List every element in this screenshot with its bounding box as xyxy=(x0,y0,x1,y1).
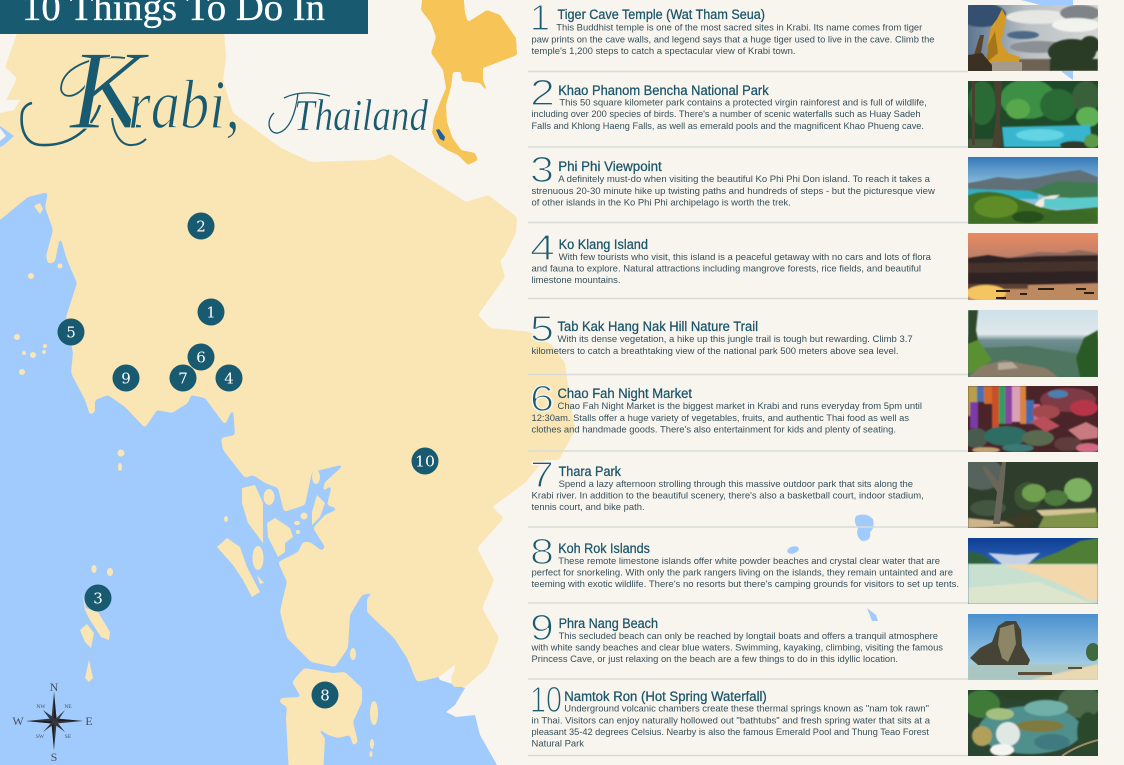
list item 7: Thara Park xyxy=(528,454,1098,528)
compass rose xyxy=(12,680,93,764)
compass rose: S xyxy=(51,750,57,764)
photo: park trees xyxy=(968,462,1098,528)
list item 5: Tab Kak Hang Nak Hill Nature Trail: With its dense vegetation, a hike up this jungle trail is tough but rewarding. Climb 3.7 xyxy=(558,334,913,345)
list item 7: Thara Park: Krabi river. In addition to the beautiful scenery, there's also a basketball court, indoor stadium, xyxy=(532,490,924,502)
marker 8: 8 xyxy=(320,686,330,704)
list item 9: Phra Nang Beach xyxy=(528,607,1100,680)
list item 10: Namtok Ron: pleasant 35-42 degrees Celsius. Nearby is also the famous Emerald Pool and Thung Teao Forest xyxy=(532,727,929,738)
marker 5: 5 xyxy=(66,324,76,342)
list item 2: Khao Phanom Bencha National Park: Khao Phanom Bencha National Park xyxy=(558,83,769,98)
marker 10: 10 xyxy=(415,452,435,470)
marker 4 xyxy=(216,364,242,392)
photo: limestone rock at the beach xyxy=(968,614,1098,680)
list item 10: Namtok Ron: Natural Park xyxy=(532,738,584,750)
list item 4: Ko Klang Island xyxy=(528,227,1098,301)
list item 3: Phi Phi Viewpoint: strenuous 20-30 minute hike up twisting paths and hundreds of steps - but the picturesque view xyxy=(532,186,935,197)
water patches behind the list xyxy=(1021,0,1073,80)
marker 2 xyxy=(188,212,214,240)
list item 4: Ko Klang Island: Ko Klang Island xyxy=(559,237,648,252)
list item 10: Namtok Ron: 10 xyxy=(530,679,562,720)
photo: night market fabrics xyxy=(968,386,1098,452)
marker 10 xyxy=(412,448,438,474)
compass rose: N xyxy=(50,680,59,694)
compass rose: SE xyxy=(65,734,72,740)
list item 10: Namtok Ron: in Thai. Visitors can enjoy naturally hollowed out "bathtubs" and fresh spring water that sits at a xyxy=(532,716,931,726)
list item 8: Koh Rok Islands: Koh Rok Islands xyxy=(558,541,650,556)
photo: hot spring waterfall xyxy=(968,690,1098,756)
list item 3: Phi Phi Viewpoint: 3 xyxy=(530,149,554,190)
list item 8: Koh Rok Islands: These remote limestone islands offer white powder beaches and crystal clear water that are xyxy=(558,556,940,567)
title: Krabi,: K xyxy=(68,29,150,153)
title: Krabi, xyxy=(22,29,240,153)
list item 6: Chao Fah Night Market: clothes and handmade goods. There's also entertainment for kids and plenty of seating. xyxy=(532,424,896,436)
list item 5: Tab Kak Hang Nak Hill Nature Trail xyxy=(528,308,1098,377)
list item 7: Thara Park: 7 xyxy=(530,454,554,495)
marker 8 xyxy=(312,682,338,708)
photo: jungle and emerald pool xyxy=(968,81,1098,148)
marker 7: 7 xyxy=(178,370,188,388)
list item 3: Phi Phi Viewpoint: Phi Phi Viewpoint xyxy=(558,159,662,174)
list item 4: Ko Klang Island: and fauna to explore. Natural attractions including mangrove forests, rice fields, and beautiful xyxy=(532,264,921,274)
marker 9: 9 xyxy=(121,370,131,388)
list item 4: Ko Klang Island: limestone mountains. xyxy=(532,275,620,286)
list item 1: Tiger Cave Temple: This Buddhist temple is one of the most sacred sites in Krabi. Its name comes from tiger xyxy=(556,22,922,34)
list item 9: Phra Nang Beach: This secluded beach can only be reached by longtail boats and offers a tranquil atmosphere xyxy=(559,631,938,642)
compass rose: E xyxy=(85,714,93,728)
list item 2: Khao Phanom Bencha National Park: Falls and Khlong Haeng Falls, as well as emerald pools and the magnificent Khao Phueng cave. xyxy=(532,121,924,132)
list item 2: Khao Phanom Bencha National Park xyxy=(528,72,1100,149)
list item 9: Phra Nang Beach: Princess Cave, or just relaxing on the beach are a few things to do in this idyllic location. xyxy=(532,654,898,665)
list item 4: Ko Klang Island: 4 xyxy=(530,227,555,268)
marker 6 xyxy=(188,344,214,370)
marker 3: 3 xyxy=(93,590,103,608)
list item 8: Koh Rok Islands xyxy=(528,531,1098,604)
list item 1: Tiger Cave Temple xyxy=(528,0,1100,72)
list item 7: Thara Park: tennis court, and bike path. xyxy=(532,502,645,513)
compass rose: NE xyxy=(64,704,72,710)
islands xyxy=(14,203,378,757)
list item 9: Phra Nang Beach: 9 xyxy=(530,607,554,648)
marker 3 xyxy=(84,584,112,612)
marker 9 xyxy=(112,364,140,392)
list item 2: Khao Phanom Bencha National Park: including over 200 species of birds. There's a number of scenic waterfalls such as Huay Sadeh xyxy=(532,109,920,120)
small bay inlet xyxy=(0,100,20,147)
list item 4: Ko Klang Island: With few tourists who visit, this island is a peaceful getaway with no cars and lots of flora xyxy=(559,252,932,263)
mainland xyxy=(0,20,575,687)
list item 5: Tab Kak Hang Nak Hill Nature Trail: Tab Kak Hang Nak Hill Nature Trail xyxy=(558,319,758,334)
photo: white sand beach xyxy=(968,538,1098,604)
list item 3: Phi Phi Viewpoint xyxy=(528,149,1098,224)
photo: sunset over mangroves xyxy=(968,233,1098,300)
marker 4: 4 xyxy=(224,370,234,388)
list item 2: Khao Phanom Bencha National Park: 2 xyxy=(530,72,555,113)
list item 8: Koh Rok Islands: 8 xyxy=(530,531,554,572)
locator map of Thailand xyxy=(421,0,517,165)
photo: Phi Phi island view xyxy=(968,157,1098,224)
list item 5: Tab Kak Hang Nak Hill Nature Trail: kilometers to catch a breathtaking view of the national park 500 meters above sea level. xyxy=(532,346,898,357)
list item 6: Chao Fah Night Market: 6 xyxy=(530,378,554,419)
list item 2: Khao Phanom Bencha National Park: This 50 square kilometer park contains a protected virgin rainforest and is full of wildlife, xyxy=(559,98,927,108)
list item 3: Phi Phi Viewpoint: A definitely must-do when visiting the beautiful Ko Phi Phi Don island. To reach it takes a xyxy=(558,174,931,185)
marker 6: 6 xyxy=(196,348,206,366)
list item 10: Namtok Ron xyxy=(528,679,1102,756)
photo: golden Buddha xyxy=(968,5,1098,71)
compass rose: SW xyxy=(36,734,45,740)
list item 6: Chao Fah Night Market: Chao Fah Night Market is the biggest market in Krabi and runs everyday from 5pm until xyxy=(558,401,922,412)
list item 7: Thara Park: Spend a lazy afternoon strolling through this massive outdoor park that sits along the xyxy=(559,479,913,490)
title: Thailand: Thailand xyxy=(294,91,429,140)
list item 7: Thara Park: Thara Park xyxy=(559,464,621,479)
list item 1: Tiger Cave Temple: temple's 1,200 steps to catch a spectacular view of Krabi town. xyxy=(532,46,796,57)
map markers xyxy=(58,212,438,708)
marker 2: 2 xyxy=(196,218,206,236)
list item 10: Namtok Ron: Namtok Ron (Hot Spring Waterfall) xyxy=(564,689,767,704)
marker 7 xyxy=(170,364,196,392)
sea xyxy=(0,190,497,765)
list item 1: Tiger Cave Temple: Tiger Cave Temple (Wat Tham Seua) xyxy=(558,7,765,22)
list item 6: Chao Fah Night Market: Chao Fah Night Market xyxy=(558,386,692,401)
list item 9: Phra Nang Beach: with white sandy beaches and clear blue waters. Swimming, kayaking, climbing, visiting the famous xyxy=(531,642,943,654)
title banner xyxy=(0,0,368,34)
list item 3: Phi Phi Viewpoint: of other islands in the Ko Phi Phi archipelago is worth the trek. xyxy=(532,198,791,208)
list item 6: Chao Fah Night Market xyxy=(528,378,1100,453)
photo: valley view xyxy=(968,310,1098,377)
list item 1: Tiger Cave Temple: paw prints on the cave walls, and legend says that a huge tiger used to live in the cave. Climb the xyxy=(532,34,934,46)
list item 6: Chao Fah Night Market: 12:30am. Stalls offer a huge variety of vegetables, fruits, and authentic Thai food as well as xyxy=(532,413,909,424)
list item 5: Tab Kak Hang Nak Hill Nature Trail: 5 xyxy=(530,308,554,349)
marker 5 xyxy=(58,318,84,346)
marker 1 xyxy=(198,298,224,326)
list item 9: Phra Nang Beach: Phra Nang Beach xyxy=(559,616,658,631)
list item 10: Namtok Ron: Underground volcanic chambers create these thermal springs known as "nam tok rawn" xyxy=(564,704,929,714)
list item 8: Koh Rok Islands: perfect for snorkeling. With only the park rangers living on the islands, they remain untainted and are xyxy=(532,568,953,578)
compass rose: W xyxy=(12,714,24,728)
title: Krabi,: rabi, xyxy=(128,67,240,144)
list item 8: Koh Rok Islands: teeming with exotic wildlife. There's no resorts but there's camping grounds for visitors to set up tents. xyxy=(532,579,959,590)
marker 1: 1 xyxy=(206,304,216,322)
island at marker 8 xyxy=(279,668,362,765)
compass rose: NW xyxy=(36,704,46,710)
